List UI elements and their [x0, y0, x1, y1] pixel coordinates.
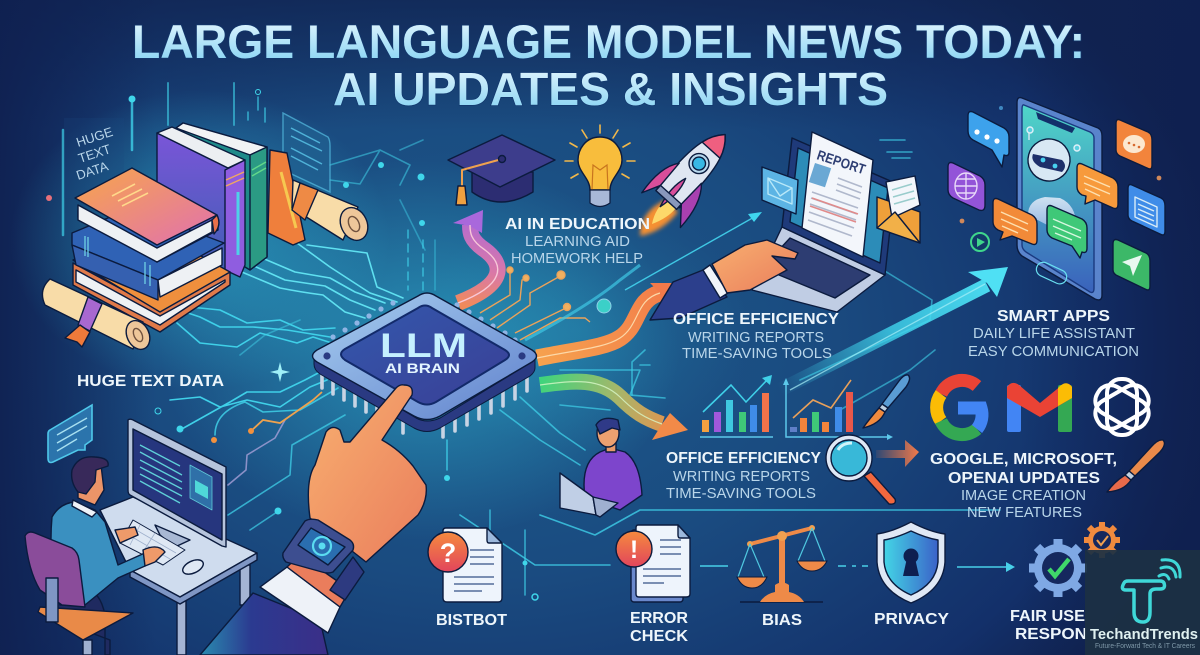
icon: gear with check: [1029, 539, 1087, 597]
icon: floating text panel reading huge text data: HUGE: [74, 124, 115, 150]
label: office efficiency: WRITING REPORTS: [688, 329, 824, 346]
icon: floating document: [283, 113, 330, 192]
chip: LLM AI brain: AI BRAIN: [385, 360, 460, 376]
circuit traces: data flow from books to chip: [63, 83, 1000, 595]
bottom labels: PRIVACY: [874, 611, 949, 628]
icon: floating text panel reading huge text data: [64, 118, 124, 198]
line arrow: thin cyan: [525, 212, 762, 340]
icon: scroll left: [42, 279, 154, 353]
bottom labels: BIAS: [762, 612, 802, 629]
icon: keyboard and mouse: [120, 520, 206, 577]
arrow: to fair use: [957, 562, 1015, 572]
arrow: to office efficiency: [537, 283, 685, 358]
icon: chat bubble blue: [968, 112, 1009, 167]
bottom labels: CHECK: [630, 628, 688, 645]
icon: bar chart two: [783, 378, 893, 440]
icon: news tile: [1128, 184, 1165, 235]
label: smart apps: EASY COMMUNICATION: [968, 343, 1139, 360]
watermark logo: TechandTrends: TechandTrends: [1090, 626, 1198, 643]
icon: floating text panel reading huge text data: TEXT: [76, 141, 113, 166]
icon: floating text panel reading huge text data: DATA: [74, 158, 110, 183]
label: office efficiency: TIME-SAVING TOOLS: [682, 345, 832, 362]
icon: laptop with report: REPORT: [815, 147, 868, 177]
chip: LLM AI brain: [312, 293, 536, 437]
circuit nodes: [46, 90, 538, 600]
orange circuit lines from chip: [480, 267, 590, 340]
icon: OpenAI knot: [1090, 379, 1154, 435]
icon: globe tile: [948, 162, 985, 210]
icon: magnifier: [826, 435, 895, 504]
label: vendor updates: IMAGE CREATION: [961, 487, 1086, 504]
bottom labels: RESPON: [1015, 626, 1087, 643]
icon: green chat bubble: [1047, 206, 1087, 258]
icon: envelope with letter: [877, 176, 920, 243]
icon: hand typing on laptop: [650, 240, 798, 320]
title: [132, 15, 1085, 115]
label: vendor updates: NEW FEATURES: [967, 504, 1082, 521]
icon: rocket: [640, 118, 747, 236]
bottom labels: ERROR: [630, 610, 688, 627]
icon: graduation cap: [448, 135, 555, 205]
label: AI in education: AI IN EDUCATION: [505, 216, 650, 233]
orange circuit trace and sparkle: [251, 200, 600, 431]
icon: document with exclamation mark: [616, 525, 690, 602]
icon: document with question mark: ?: [440, 538, 456, 568]
icon: orange chat bubble: [993, 198, 1037, 244]
watermark logo: TechandTrends: [1085, 550, 1200, 655]
title: AI UPDATES & INSIGHTS: [333, 63, 888, 115]
label: vendor updates: OPENAI UPDATES: [948, 470, 1100, 487]
icon: Google G: [937, 380, 982, 435]
arrow: to office efficiency lower: [540, 382, 688, 440]
icon: person with laptop: [560, 418, 642, 517]
label: office efficiency lower: OFFICE EFFICIENCY: [666, 450, 821, 467]
arrow: to education: [453, 210, 498, 303]
icon: bar chart one: [700, 375, 773, 437]
icon: standing books: [157, 123, 305, 277]
icon: send tile: [1113, 240, 1150, 290]
icon: computer monitor: [128, 419, 226, 547]
icon: balance scale: [737, 525, 827, 602]
label: office efficiency lower: WRITING REPORTS: [673, 468, 810, 485]
label: vendor updates: GOOGLE, MICROSOFT,: [930, 451, 1117, 468]
bottom labels: FAIR USE: [1010, 608, 1085, 625]
label: AI in education: HOMEWORK HELP: [511, 250, 643, 267]
label: office efficiency: OFFICE EFFICIENCY: [673, 311, 839, 328]
icon: smartphone with robot: [1017, 98, 1102, 300]
icon: chat bubble left: [48, 405, 92, 462]
icon: document with question mark: [428, 528, 502, 602]
icon: orange gear: [1084, 522, 1120, 558]
label: AI in education: [505, 216, 650, 267]
bottom labels: [436, 608, 1087, 645]
arrow: to vendor updates: [876, 440, 919, 467]
label: office efficiency lower: [666, 450, 821, 502]
title: LARGE LANGUAGE MODEL NEWS TODAY:: [132, 15, 1085, 68]
icon: chair: [25, 532, 133, 655]
icon: laptop with report: [752, 132, 895, 312]
icon: orange speech tile: [1116, 120, 1152, 169]
dash connectors between bottom icons: [700, 565, 868, 567]
label: AI in education: LEARNING AID: [525, 233, 630, 250]
label: huge text data: HUGE TEXT DATA: [77, 373, 224, 390]
icon: person at desk: [50, 457, 165, 655]
label: office efficiency: [673, 311, 839, 362]
bottom labels: BISTBOT: [436, 612, 507, 629]
icon: lightbulb: [565, 125, 635, 206]
icon: paintbrush: [863, 375, 910, 428]
icon: play circle: [960, 106, 1161, 251]
icon: pointing hand with smartwatch: [200, 385, 426, 655]
icon: Gmail M: [1007, 383, 1072, 432]
icon: document with exclamation mark: !: [630, 536, 638, 564]
label: smart apps: [968, 308, 1139, 360]
label: vendor updates: [930, 451, 1117, 521]
icon: shield with keyhole: [877, 522, 945, 603]
icon: orange chat bubble right: [1077, 164, 1118, 208]
label: smart apps: SMART APPS: [997, 308, 1110, 325]
chip: LLM AI brain: LLM: [380, 327, 467, 365]
arrow: to smart apps: [770, 267, 1008, 395]
label: office efficiency lower: TIME-SAVING TOOLS: [666, 485, 816, 502]
icon: paintbrush right: [1107, 440, 1164, 492]
icon: scroll right: [292, 180, 373, 245]
icon: desk: [100, 497, 257, 655]
icon: stacked books: [72, 168, 230, 332]
label: smart apps: DAILY LIFE ASSISTANT: [973, 325, 1135, 342]
